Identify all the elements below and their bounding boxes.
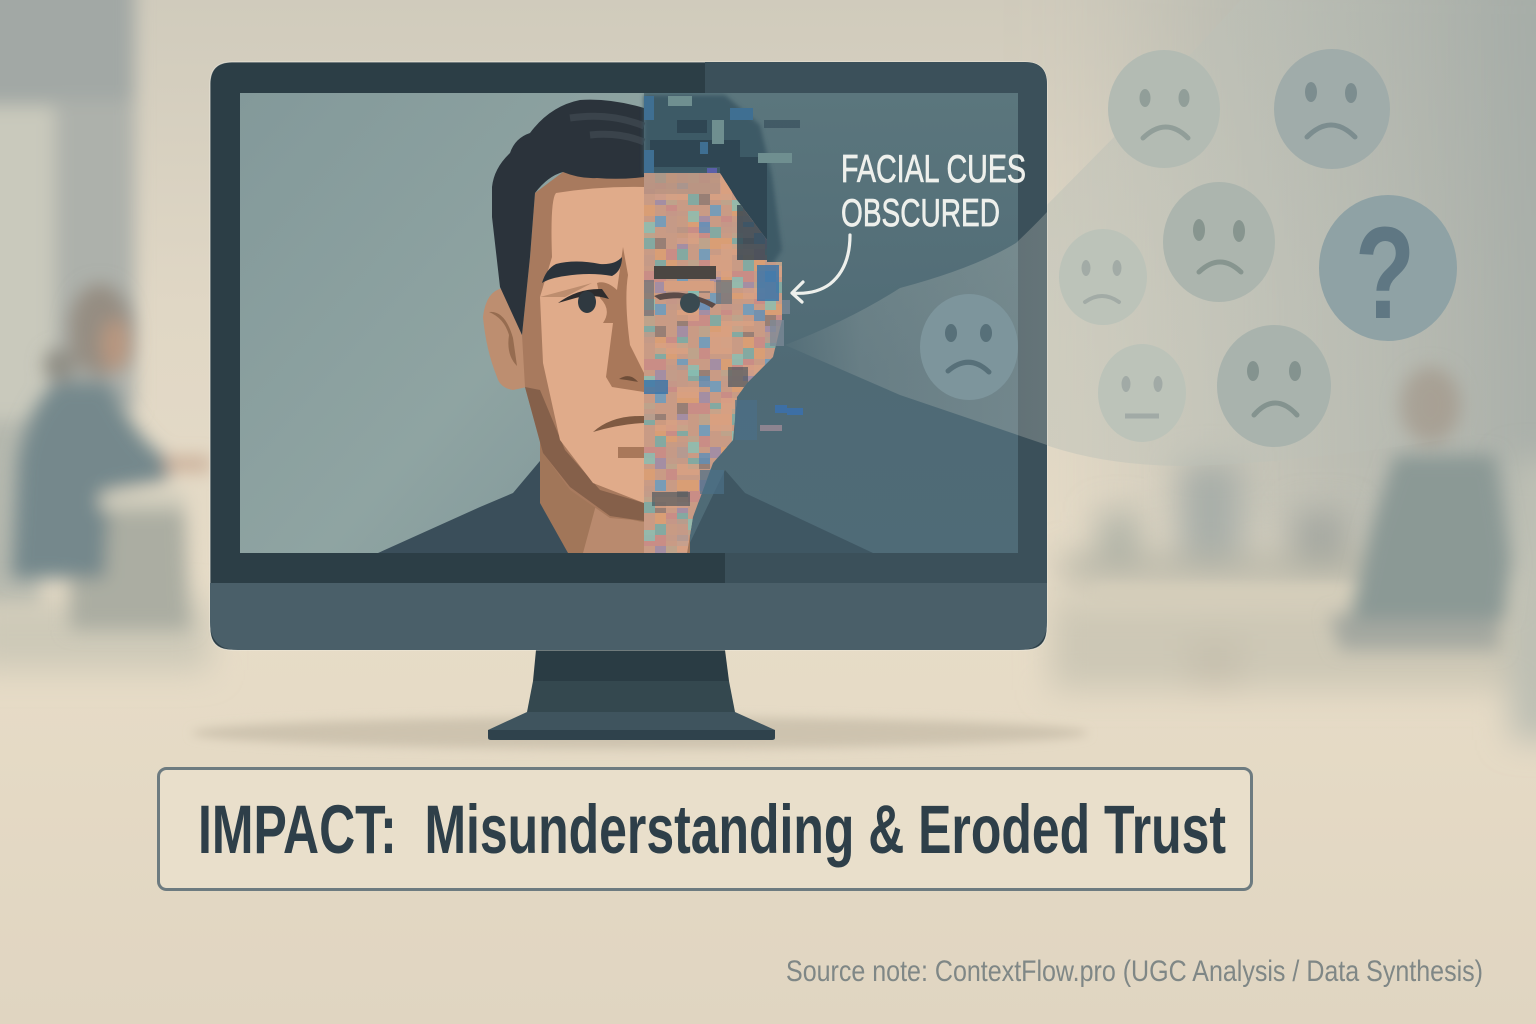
light skin [540,187,644,503]
ear [483,288,527,390]
arrow pointing at face [792,235,850,302]
hair [492,100,644,335]
face 8 on screen [920,294,1018,400]
face 3 [1163,182,1275,302]
label: facial cues obscured: FACIAL CUES [841,148,1026,191]
floating confused faces [920,49,1457,447]
speech beam outside monitor [1040,0,1536,466]
monitor chin [210,583,1047,650]
nostril [619,376,638,382]
lower lip shadow [618,447,644,458]
label: facial cues obscured [841,148,1026,235]
face 1 [1108,50,1220,168]
scattered pixels [700,300,803,494]
label: facial cues obscured: OBSCURED [841,192,1000,235]
face 4 [1059,229,1147,325]
face 2 [1274,49,1390,169]
pixelated brow and eye [644,266,732,316]
pixelated half of face [644,95,803,553]
face 6 neutral [1098,344,1186,442]
eye [558,289,609,303]
monitor desk shadow [192,717,1088,749]
dissolved hair pixels [644,95,800,265]
question mark bubble: ? [1355,199,1415,346]
nose and eye socket shade [597,247,644,392]
face 7 [1217,325,1331,447]
head shading [522,172,644,521]
shirt [378,455,570,553]
video call screen [240,93,1018,553]
speech beam across screen and bezel [785,212,1047,445]
brow [542,257,622,283]
mouth [593,416,644,432]
blurred person left [12,284,211,630]
jaw shadow [525,387,644,521]
face mosaic [644,172,794,553]
impact banner [158,768,1252,890]
monitor stand [488,650,775,740]
man portrait, clear half [378,100,873,553]
monitor [210,62,1047,740]
neck [540,440,690,553]
monitor bezel [210,62,1047,650]
blurred person right [1330,367,1512,650]
question mark bubble [1319,195,1457,346]
